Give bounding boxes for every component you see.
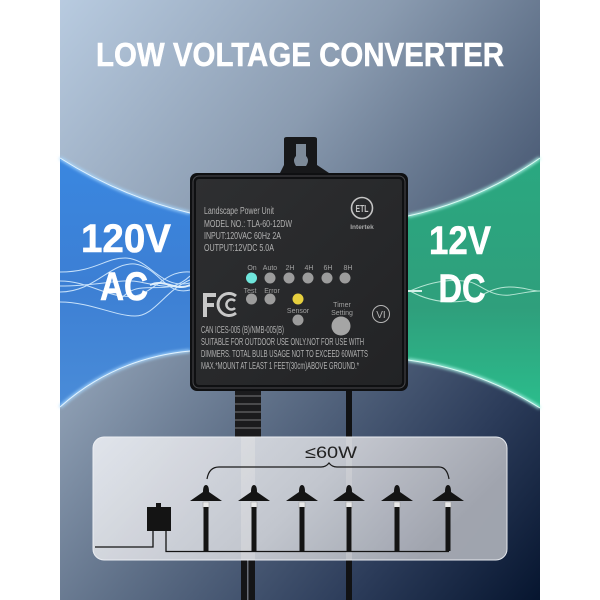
- LED indicator labels: 6H: [324, 265, 332, 272]
- LED indicator labels: On: [247, 265, 257, 272]
- product specification text: OUTPUT:12VDC 5.0A: [204, 243, 274, 254]
- icon: DC waves: [408, 280, 540, 302]
- icon: AC waves: [60, 258, 190, 316]
- icon: ETL mark: Intertek: [350, 224, 374, 231]
- label: wattage limit: ≤60W: [305, 443, 357, 462]
- title: LOW VOLTAGE CONVERTER: [96, 36, 504, 73]
- LED indicator labels: 8H: [344, 265, 352, 272]
- panel: 12V DC output wedge: [408, 158, 540, 408]
- icon: FCC logo: [203, 293, 236, 317]
- label: AC: AC: [100, 265, 148, 309]
- product specification text: INPUT:120VAC 60Hz 2A: [204, 231, 281, 242]
- LED indicators: [246, 272, 350, 336]
- icon: mounting tab: [280, 137, 329, 173]
- LED indicator labels: Setting: [331, 310, 353, 317]
- icon: VI efficiency mark: [372, 306, 390, 322]
- bracket: [207, 463, 449, 479]
- product specification text: [204, 206, 292, 254]
- icon: ETL mark: ETL: [356, 204, 368, 215]
- panel: converter unit: [190, 173, 408, 391]
- product specification text: Landscape Power Unit: [204, 206, 274, 217]
- label: DC: DC: [438, 267, 486, 311]
- label: 12V: 12V: [429, 219, 491, 263]
- LED indicator labels: 4H: [305, 265, 313, 272]
- cables below the converter: [235, 388, 352, 600]
- wiring: [95, 531, 449, 552]
- panel: wiring diagram: [93, 437, 507, 560]
- icon: path lights: [190, 485, 464, 551]
- LED indicator labels: Test: [244, 288, 256, 295]
- icon: VI efficiency mark: VI: [376, 310, 386, 321]
- icon: ETL mark: [350, 198, 374, 231]
- panel: 120V AC input wedge: [60, 158, 190, 407]
- mounting slot: [294, 144, 308, 166]
- icon: converter: [147, 503, 171, 531]
- LED indicator labels: [244, 265, 353, 317]
- compliance text: MAX.*MOUNT AT LEAST 1 FEET(30cm)ABOVE GROUND.*: [201, 361, 359, 372]
- compliance text: DIMMERS. TOTAL BULB USAGE NOT TO EXCEED 60WATTS: [201, 349, 368, 360]
- label: 120V: 120V: [81, 217, 171, 261]
- LED indicator labels: Sensor: [287, 308, 310, 315]
- compliance text: [201, 325, 368, 372]
- cables seen through panel: [241, 437, 352, 560]
- LED indicator labels: Timer: [333, 302, 351, 309]
- compliance text: CAN ICES-005 (B)/NMB-005(B): [201, 325, 284, 336]
- LED indicator labels: Auto: [263, 265, 277, 272]
- LED indicator labels: Error: [264, 288, 280, 295]
- compliance text: SUITABLE FOR OUTDOOR USE ONLY.NOT FOR USE WITH: [201, 337, 364, 348]
- background panel: [60, 0, 540, 600]
- product specification text: MODEL NO.: TLA-60-12DW: [204, 219, 292, 230]
- LED indicator labels: 2H: [286, 265, 294, 272]
